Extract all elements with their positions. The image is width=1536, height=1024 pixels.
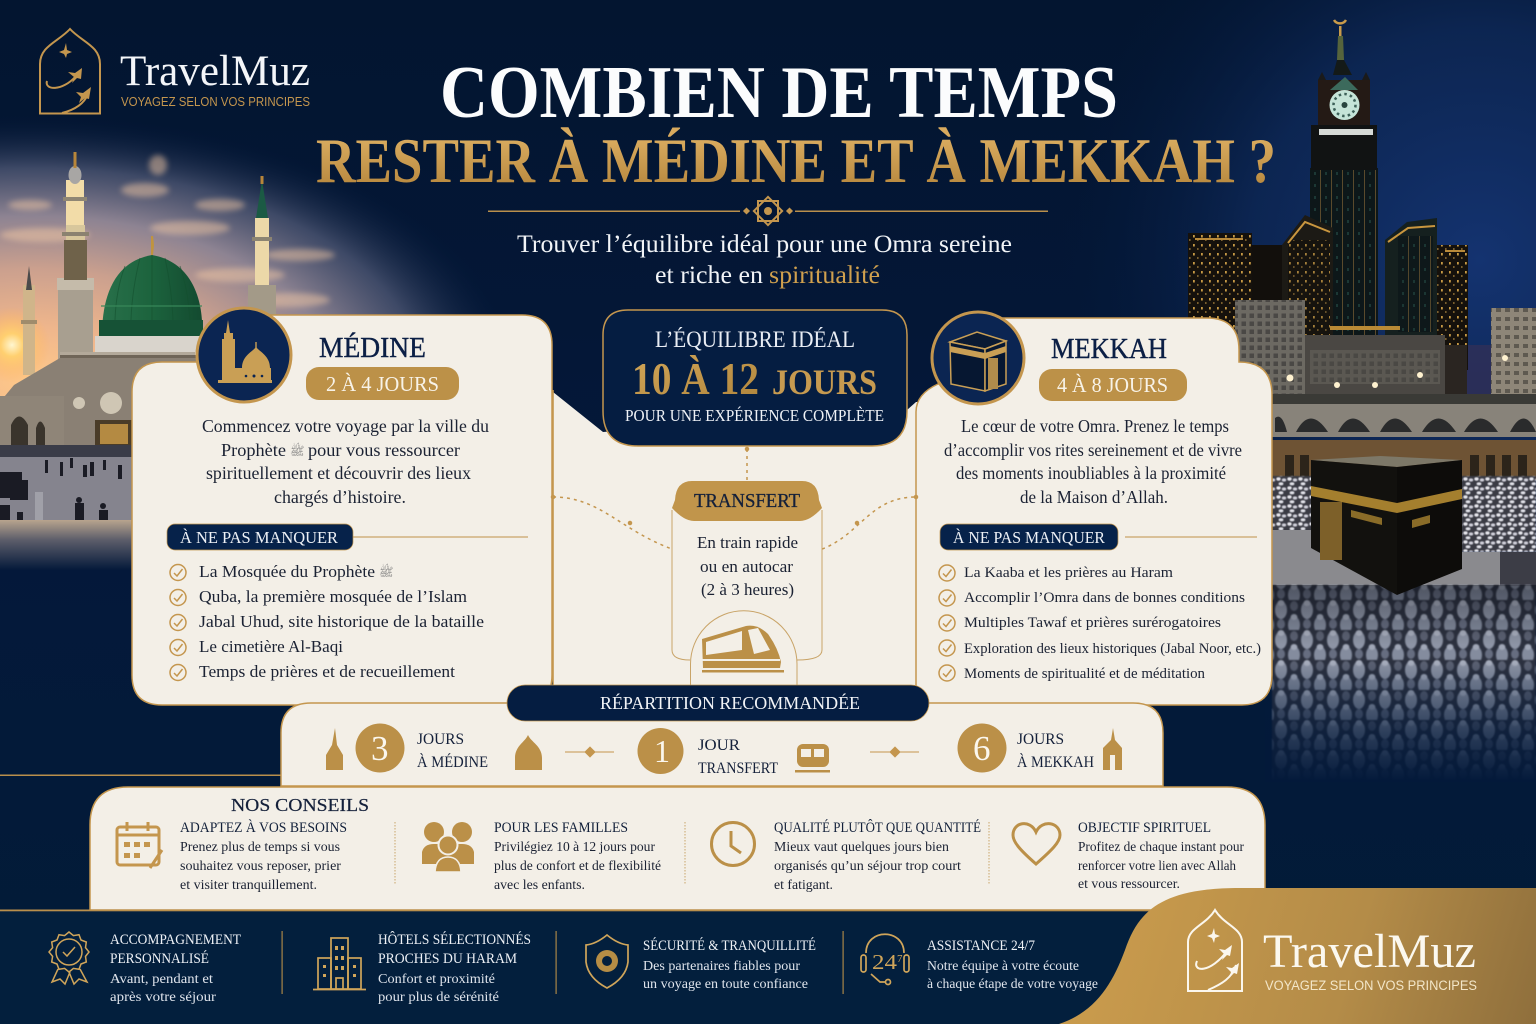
must-see label xyxy=(940,524,1257,550)
plaza with people xyxy=(0,445,140,521)
service: support xyxy=(49,932,241,1004)
service: safety: Des partenaires fiables pour xyxy=(643,958,801,973)
checklist: La Mosquée du Prophète xyxy=(199,562,375,581)
Kaaba xyxy=(1311,456,1462,595)
split: 6 days Mekkah xyxy=(958,724,1122,772)
tip: quality: et fatigant. xyxy=(774,877,833,892)
split: 1 day transfer: JOUR xyxy=(698,737,740,754)
callout: ideal balance: JOURS xyxy=(772,362,877,402)
service: safety: SÉCURITÉ & TRANQUILLITÉ xyxy=(643,937,816,954)
heading: NOS CONSEILS xyxy=(231,795,369,815)
sun xyxy=(0,307,50,383)
description: d’accomplir vos rites sereinement et de vivre xyxy=(944,440,1242,460)
service: assistance: 7 xyxy=(897,953,903,965)
service: support: Avant, pendant et xyxy=(110,971,213,986)
duration badge xyxy=(306,367,459,400)
tip: adapt: souhaitez vous reposer, prier xyxy=(180,858,342,873)
tip: families: avec les enfants. xyxy=(494,877,585,892)
service: support: ACCOMPAGNEMENT xyxy=(110,932,241,948)
checklist: ﷺ xyxy=(379,563,394,579)
split: 1 day transfer xyxy=(638,728,830,777)
service: safety xyxy=(586,935,816,991)
icon: Kaaba xyxy=(932,312,1024,404)
icon: Medina mosque xyxy=(197,308,291,402)
callout: ideal balance: L’ÉQUILIBRE IDÉAL xyxy=(655,327,855,352)
duration badge xyxy=(1039,369,1187,401)
heading pill: recommended split: RÉPARTITION RECOMMANDÉE xyxy=(600,692,860,713)
checklist: Moments de spiritualité et de méditation xyxy=(964,666,1205,682)
icon: train xyxy=(690,611,797,686)
badge: transfert xyxy=(672,481,822,521)
separator xyxy=(565,746,614,758)
split: 6 days Mekkah: JOURS xyxy=(1017,731,1064,748)
description: pour vous ressourcer xyxy=(308,440,460,460)
tagline: VOYAGEZ SELON VOS PRINCIPES xyxy=(1265,978,1477,993)
tip: quality: QUALITÉ PLUTÔT QUE QUANTITÉ xyxy=(774,819,981,836)
upper crowd xyxy=(1272,476,1536,552)
floor xyxy=(1272,530,1332,592)
tip: adapt xyxy=(117,819,347,892)
checklist: Exploration des lieux historiques (Jabal Noor, etc.) xyxy=(964,641,1261,657)
must-see label: À NE PAS MANQUER xyxy=(953,528,1105,547)
logo: TravelMuz header xyxy=(40,29,310,114)
checklist xyxy=(939,565,1261,682)
tip: families: plus de confort et de flexibilité xyxy=(494,858,661,873)
small far minaret xyxy=(21,266,37,375)
service: hotels: PROCHES DU HARAM xyxy=(378,951,517,967)
tip: spiritual goal: et vous ressourcer. xyxy=(1078,876,1180,891)
description: En train rapide xyxy=(697,533,798,552)
service: assistance: 24 xyxy=(872,950,898,974)
service: hotels: HÔTELS SÉLECTIONNÉS xyxy=(378,931,531,948)
panel: transfer xyxy=(672,481,822,686)
service: support: PERSONNALISÉ xyxy=(110,950,209,967)
checklist: Multiples Tawaf et prières surérogatoires xyxy=(964,615,1221,631)
connector: dotted links xyxy=(552,448,918,549)
left tower block xyxy=(1188,233,1252,333)
split: 6 days Mekkah: À MEKKAH xyxy=(1017,752,1094,771)
description xyxy=(202,416,489,507)
tip: families: POUR LES FAMILLES xyxy=(494,820,628,836)
description: Prophète xyxy=(221,440,286,460)
service: assistance: ASSISTANCE 24/7 xyxy=(927,938,1035,954)
subtitle xyxy=(517,231,1012,289)
subtitle: Trouver l’équilibre idéal pour une Omra sereine xyxy=(517,231,1012,258)
logo: TravelMuz gold corner xyxy=(1059,888,1536,1024)
panel: Médine xyxy=(132,308,552,705)
checklist: Jabal Uhud, site historique de la bataille xyxy=(199,612,484,631)
description: de la Maison d’Allah. xyxy=(1020,487,1168,507)
service: safety: un voyage en toute confiance xyxy=(643,976,808,991)
tip: spiritual goal: OBJECTIF SPIRITUEL xyxy=(1078,820,1211,836)
service: assistance xyxy=(861,934,1098,991)
clock tower xyxy=(1310,20,1378,338)
split: 3 days Medina: JOURS xyxy=(417,731,464,748)
checklist: Temps de prières et de recueillement xyxy=(199,662,455,681)
lower crowd xyxy=(1272,585,1536,780)
duration badge: 4 À 8 JOURS xyxy=(1057,373,1168,397)
subtitle: spiritualité xyxy=(769,262,880,289)
tagline: VOYAGEZ SELON VOS PRINCIPES xyxy=(121,95,310,109)
brand name: TravelMuz xyxy=(120,48,310,95)
heading pill: recommended split xyxy=(507,685,929,721)
dusk glow xyxy=(1450,345,1500,397)
description: des moments inoubliables à la proximité xyxy=(956,463,1226,483)
service: assistance: à chaque étape de votre voyage xyxy=(927,976,1098,991)
subtitle: et riche en xyxy=(655,262,764,289)
service: support: après votre séjour xyxy=(110,989,217,1004)
service: hotels: Confort et proximité xyxy=(378,971,495,986)
split: 3 days Medina xyxy=(326,724,542,772)
wings xyxy=(1282,215,1333,340)
icon: arch with planes xyxy=(40,29,100,114)
duration badge: 2 À 4 JOURS xyxy=(326,372,439,396)
callout: ideal balance xyxy=(603,310,907,446)
description xyxy=(697,533,798,599)
description: ou en autocar xyxy=(700,557,794,576)
title: RESTER À MÉDINE ET À MEKKAH ? xyxy=(316,126,1276,196)
title: COMBIEN DE TEMPS xyxy=(440,52,1118,134)
icon: arch with planes xyxy=(1188,910,1242,991)
tip: families xyxy=(422,820,661,892)
tip: spiritual goal: renforcer votre lien avec Allah xyxy=(1078,858,1236,873)
green dome xyxy=(99,236,203,337)
tip: families: Privilégiez 10 à 12 jours pour xyxy=(494,839,655,854)
callout: ideal balance: POUR UNE EXPÉRIENCE COMPLÈTE xyxy=(625,406,884,425)
split: 1 day transfer: TRANSFERT xyxy=(698,760,778,777)
checklist: Le cimetière Al-Baqi xyxy=(199,637,343,656)
panel: central connector background xyxy=(552,390,925,700)
description: (2 à 3 heures) xyxy=(701,580,794,599)
ornamental divider xyxy=(488,197,1048,225)
tip: quality: Mieux vaut quelques jours bien xyxy=(774,839,949,854)
brand name: TravelMuz xyxy=(1263,925,1476,978)
lower grey buildings xyxy=(1235,300,1305,396)
checklist: Accomplir l’Omra dans de bonnes conditions xyxy=(964,590,1245,606)
tip: adapt: Prenez plus de temps si vous xyxy=(180,839,340,854)
service: hotels xyxy=(313,931,531,1004)
split: 1 day transfer: 1 xyxy=(654,733,670,769)
split: 6 days Mekkah: 6 xyxy=(973,729,990,768)
footer band xyxy=(0,910,1536,1024)
split: 3 days Medina: 3 xyxy=(371,729,388,768)
photo: Abraj Al-Bait clock tower and buildings xyxy=(1188,20,1536,397)
right tower block xyxy=(1437,245,1468,370)
tip: adapt: et visiter tranquillement. xyxy=(180,877,317,892)
right minaret xyxy=(248,176,276,325)
split: 3 days Medina: À MÉDINE xyxy=(417,752,488,771)
title xyxy=(316,52,1276,196)
heading: MEKKAH xyxy=(1051,333,1167,365)
photo: Haram arcades, Kaaba and crowd xyxy=(1265,394,1536,782)
description: ﷺ xyxy=(290,442,304,458)
must-see label: À NE PAS MANQUER xyxy=(180,528,338,547)
description xyxy=(944,416,1242,507)
badge: transfert: TRANSFERT xyxy=(694,490,800,512)
tip: spiritual goal: Profitez de chaque instant pour xyxy=(1078,839,1244,854)
tip: spiritual goal xyxy=(1013,820,1244,891)
separator xyxy=(870,746,919,758)
service: assistance: Notre équipe à votre écoute xyxy=(927,958,1079,973)
mosque building xyxy=(0,336,230,450)
main minaret xyxy=(57,152,94,365)
must-see label xyxy=(167,524,528,550)
tip: quality xyxy=(712,819,981,892)
service: hotels: pour plus de sérénité xyxy=(378,989,499,1004)
description: chargés d’histoire. xyxy=(274,487,406,507)
tip: adapt: ADAPTEZ À VOS BESOINS xyxy=(180,819,347,836)
callout: ideal balance: 10 À 12 xyxy=(632,353,759,404)
panel: Mekkah xyxy=(916,312,1272,705)
heading: MÉDINE xyxy=(319,331,426,364)
panel: tips xyxy=(90,787,1265,910)
photo: Medina mosque at sunset xyxy=(0,115,530,570)
checklist: La Kaaba et les prières au Haram xyxy=(964,565,1173,581)
checklist xyxy=(170,562,484,681)
panel: recommended split xyxy=(0,703,1163,786)
description: Commencez votre voyage par la ville du xyxy=(202,416,489,436)
tip: quality: organisés qu’un séjour trop court xyxy=(774,858,961,873)
checklist: Quba, la première mosquée de l’Islam xyxy=(199,587,467,606)
description: spirituellement et découvrir des lieux xyxy=(206,463,471,483)
description: Le cœur de votre Omra. Prenez le temps xyxy=(961,416,1229,436)
